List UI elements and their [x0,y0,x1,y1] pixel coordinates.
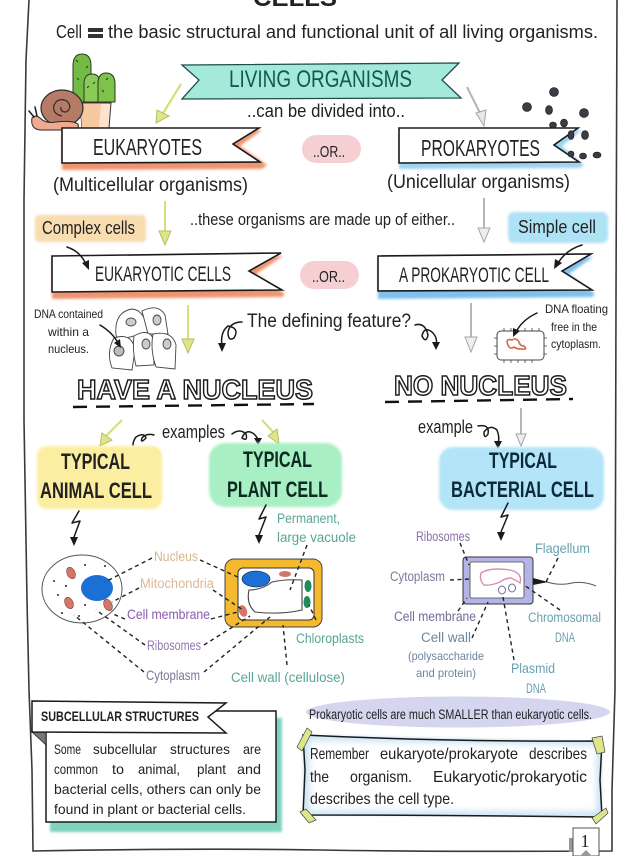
arrow: curly right [415,324,440,350]
ribosome dots [53,564,106,617]
labels: animal and plant cell parts: Permanent, [277,511,340,526]
arrow: bacteria zigzag [497,503,508,541]
pill: or: ..OR.. [312,269,345,286]
nucleus [242,571,270,587]
icon: scattered bacteria dots [522,88,601,159]
text: DNA contained: within a [47,325,89,339]
pill: complex cells [35,215,146,242]
page number tab [569,828,599,856]
heading: have a nucleus: HAVE A NUCLEUS [77,374,313,405]
body text: bacterial cells, others can only be [54,781,261,797]
arrow: to nucleus in cell [100,325,121,348]
text: DNA floating: cytoplasm. [551,337,601,351]
labels: animal and plant cell parts [127,511,364,685]
mitochondria [63,566,114,612]
labels: bacterial cell parts: Chromosomal [528,610,601,625]
pill: typical animal cell: TYPICAL [61,449,130,474]
text: DNA contained: nucleus. [48,342,89,356]
heading: no nucleus: NO NUCLEUS [394,370,567,401]
banner: prokaryotes: PROKARYOTES [421,135,540,161]
snail body [32,116,78,130]
illustration: bacterial cell [463,557,596,604]
pill: typical animal cell [37,446,162,509]
pill: typical animal cell: ANIMAL CELL [40,478,152,503]
arrow: animal zigzag [70,511,80,546]
banner: eukaryotes: EUKARYOTES [93,134,202,160]
body text: common [54,761,98,777]
banner: living organisms [182,63,461,99]
banner: prokaryotic cell: A PROKARYOTIC CELL [399,264,549,287]
panel: subcellular structures [32,701,282,832]
pill: typical plant cell: TYPICAL [243,447,312,472]
text: can be divided into: ..can be divided into.. [247,101,405,121]
arrow: curly left [218,322,242,352]
pill: complex cells: Complex cells [42,218,135,238]
pill: typical plant cell: PLANT CELL [227,477,328,502]
body text [54,741,261,817]
banner: living organisms: LIVING ORGANISMS [229,66,412,93]
labels: bacterial cell parts: Flagellum [535,541,590,556]
snail shell [41,90,83,126]
labels: bacterial cell parts: Cell membrane [394,609,476,624]
pill: typical bacterial cell: TYPICAL [489,448,557,473]
text: DNA floating: free in the [551,320,597,334]
definition line: Cell [56,21,82,42]
note text: eukaryote/prokaryote [380,746,518,763]
labels: bacterial cell parts: DNA [526,681,546,696]
labels: bacterial cell parts: (polysaccharide [408,649,484,663]
pot [80,103,111,128]
note text: organism. [350,769,412,786]
corner tapes [297,728,608,824]
arrow: to no nucleus [465,303,477,352]
body text: animal, [138,761,180,777]
labels: animal and plant cell parts: Chloroplasts [296,631,364,646]
fold [32,732,46,745]
note text [310,746,587,808]
arrow: to plant cell [262,420,279,444]
banner: eukaryotes [62,128,267,170]
mitochondria [279,571,291,577]
text: DNA floating [545,302,608,351]
flagellum [533,581,596,586]
labels: bacterial cell parts: Cytoplasm [390,569,445,584]
labels: animal and plant cell parts: Cytoplasm [146,667,200,683]
page number tab: 1 [580,831,590,851]
pill: simple cell: Simple cell [518,217,596,237]
note text: describes the cell type. [310,791,454,808]
plasmids [498,586,506,594]
pill: or: ..OR.. [313,144,345,161]
text: unicellular: (Unicellular organisms) [387,171,570,193]
pill: or [302,135,361,163]
arrow: to prokaryotic banner [554,245,582,269]
pill: typical plant cell [209,443,342,507]
body text: and [237,761,261,777]
pill: simple cell [508,212,608,243]
arrow: to eukaryotes [156,84,181,123]
text: examples [133,422,262,445]
pill: typical bacterial cell: BACTERIAL CELL [451,477,594,502]
text: the defining feature: The defining feature? [247,311,411,332]
labels: animal and plant cell parts: Cell membrane [127,606,210,622]
panel: remember note [297,728,608,824]
body text: to [112,761,124,777]
arrow: plant zigzag [255,505,266,544]
arrow: to eukaryotic banner [67,247,89,270]
labels: animal and plant cell parts: Nucleus [154,549,198,564]
pill: or [300,261,359,289]
arrow: to bacterial cell [516,408,526,446]
labels: bacterial cell parts: and protein) [416,666,476,680]
labels: bacterial cell parts: Ribosomes [416,529,470,544]
note text: the [310,769,329,786]
text: DNA contained: DNA contained [34,307,103,321]
panel: subcellular structures: SUBCELLULAR STRUCTURES [41,708,199,724]
text: these organisms: ..these organisms are made up of either.. [190,211,455,229]
labels: bacterial cell parts: Plasmid [511,661,555,676]
nucleus [81,575,113,601]
pill: typical bacterial cell [439,447,604,510]
banner: prokaryotic cell [378,254,595,299]
labels: animal and plant cell parts: Cell wall (cellulose) [231,670,345,685]
arrow: prokaryotes down [478,198,490,242]
text: example [418,417,502,449]
flag heading [32,701,226,733]
body text: subcellular [93,741,157,757]
pill: smaller note [306,696,610,728]
banner: eukaryotic cells [52,253,285,299]
note text: describes [529,746,587,763]
body text: Some [54,741,81,757]
arrow: to prokaryotes [467,87,486,126]
text: multicellular: (Multicellular organisms) [53,174,248,196]
arrow: to animal cell [100,420,122,446]
note text: Eukaryotic/prokaryotic [433,769,587,786]
labels: animal and plant cell parts: Mitochondria [140,576,214,591]
vacuole [248,580,302,613]
body text: plant [197,761,226,777]
arrow: to have a nucleus [182,305,194,353]
arrow: to bacterial DNA [513,313,537,337]
illustration: cactus and snail [29,54,115,130]
labels: bacterial cell parts [390,529,601,696]
labels: bacterial cell parts: DNA [555,630,575,645]
arrow: eukaryotes down [159,201,171,245]
illustration: animal cell [42,555,122,623]
text: example: example [418,417,473,437]
illustration: bacterium [494,328,547,363]
illustration: eukaryotic cell cluster [109,308,176,370]
body text: found in plant or bacterial cells. [54,801,246,817]
definition line: the basic structural and functional unit of all living organisms. [108,21,598,42]
chloroplasts [304,580,312,592]
body text: structures [170,741,230,757]
body text: are [243,741,261,757]
leader lines: cell diagrams [74,543,560,672]
labels: animal and plant cell parts: large vacuole [277,530,356,545]
chromosomal DNA [480,569,521,585]
labels: animal and plant cell parts: Ribosomes [147,637,201,653]
labels: bacterial cell parts: Cell wall [421,630,471,645]
cactus [73,54,115,102]
text: DNA floating: DNA floating [545,302,608,316]
banner: eukaryotic cells: EUKARYOTIC CELLS [95,263,231,286]
note text: Remember [310,746,369,763]
text: examples: examples [162,422,225,442]
banner: prokaryotes [399,128,584,169]
text: DNA contained [34,307,103,356]
illustration: plant cell [225,559,322,627]
